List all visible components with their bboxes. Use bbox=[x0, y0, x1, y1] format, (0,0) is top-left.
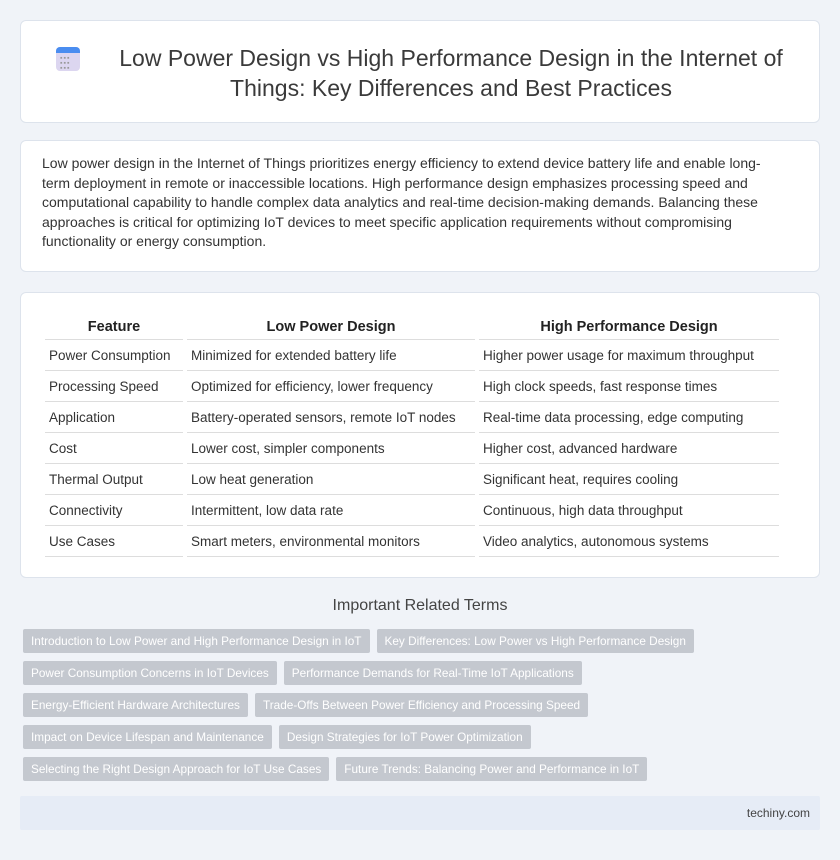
comparison table: Optimized for efficiency, lower frequency bbox=[191, 378, 433, 394]
comparison table bbox=[45, 319, 779, 557]
comparison table: Smart meters, environmental monitors bbox=[191, 534, 420, 548]
comparison table: Battery-operated sensors, remote IoT nodes bbox=[191, 410, 456, 424]
related terms tags: Energy-Efficient Hardware Architectures bbox=[31, 698, 240, 712]
title card bbox=[20, 20, 820, 123]
icon: calendar: ▪▪▪ bbox=[60, 55, 70, 62]
comparison table: High clock speeds, fast response times bbox=[483, 378, 717, 394]
related terms tags: Key Differences: Low Power vs High Performance Design bbox=[384, 634, 686, 648]
comparison table: Power Consumption bbox=[49, 348, 171, 362]
footer: techiny.com bbox=[747, 806, 810, 820]
related terms tags: Design Strategies for IoT Power Optimization bbox=[287, 730, 523, 744]
related terms tags: Power Consumption Concerns in IoT Devices bbox=[31, 666, 269, 680]
description card bbox=[20, 140, 820, 272]
icon: calendar: ▪▪▪ bbox=[60, 60, 70, 67]
comparison table: Intermittent, low data rate bbox=[191, 502, 343, 518]
description text: Low power design in the Internet of Things prioritizes energy efficiency to extend device battery life and enable long-term deployment in remote or inaccessible locations. High performance design emphasizes processing speed and computational capability to handle complex data analytics and real-time decision-making demands. Balancing these approaches is critical for optimizing IoT devices to meet specific application requirements without compromising functionality or energy consumption. bbox=[42, 155, 761, 249]
related terms tags: Performance Demands for Real-Time IoT Applications bbox=[292, 666, 574, 680]
related terms tags bbox=[23, 629, 694, 781]
comparison table: Processing Speed bbox=[49, 378, 159, 394]
comparison table: Low heat generation bbox=[191, 472, 313, 486]
related terms tags: Future Trends: Balancing Power and Performance in IoT bbox=[344, 762, 639, 776]
related terms heading: Important Related Terms bbox=[333, 597, 507, 614]
icon: calendar bbox=[56, 47, 80, 71]
comparison table: Higher cost, advanced hardware bbox=[483, 440, 677, 456]
comparison table: Lower cost, simpler components bbox=[191, 440, 385, 456]
comparison table: Higher power usage for maximum throughput bbox=[483, 348, 754, 362]
title: Low Power Design vs High Performance Design in the Internet of Things: Key Differences and Best Practices bbox=[119, 45, 783, 101]
comparison table: Cost bbox=[49, 440, 77, 456]
comparison table: Use Cases bbox=[49, 534, 115, 548]
comparison table: Video analytics, autonomous systems bbox=[483, 534, 709, 548]
comparison table card bbox=[20, 292, 820, 578]
comparison table: Feature bbox=[88, 319, 140, 335]
comparison table: High Performance Design bbox=[540, 319, 718, 335]
comparison table: Connectivity bbox=[49, 502, 123, 518]
comparison table: Low Power Design bbox=[267, 319, 395, 335]
comparison table: Thermal Output bbox=[49, 472, 143, 486]
related terms tags: Impact on Device Lifespan and Maintenance bbox=[31, 730, 264, 744]
comparison table: Application bbox=[49, 410, 115, 424]
related terms tags: Selecting the Right Design Approach for IoT Use Cases bbox=[31, 762, 321, 776]
related terms tags: Introduction to Low Power and High Performance Design in IoT bbox=[31, 634, 362, 648]
footer bbox=[20, 796, 820, 830]
comparison table: Continuous, high data throughput bbox=[483, 502, 683, 518]
related terms tags: Trade-Offs Between Power Efficiency and Processing Speed bbox=[263, 698, 580, 712]
comparison table: Significant heat, requires cooling bbox=[483, 472, 678, 486]
comparison table: Real-time data processing, edge computing bbox=[483, 410, 743, 424]
comparison table: Minimized for extended battery life bbox=[191, 348, 397, 362]
